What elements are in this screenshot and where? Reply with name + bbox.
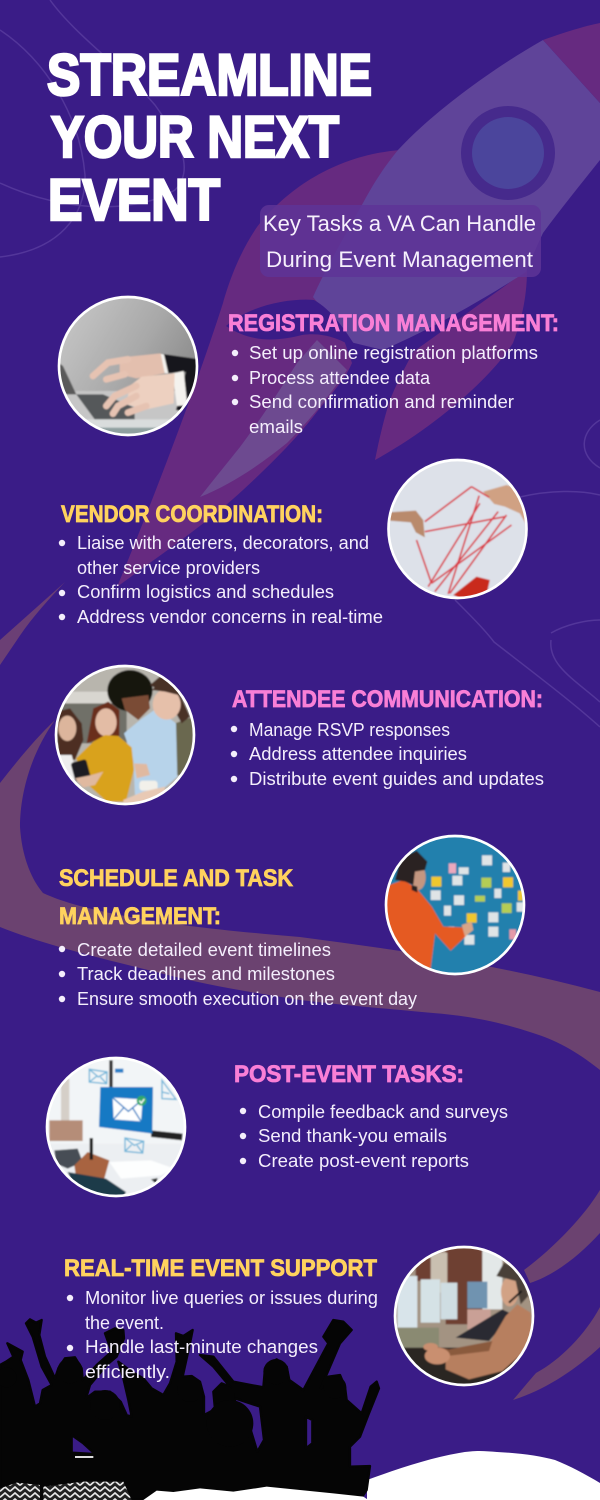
title: STREAMLINE	[47, 43, 372, 108]
heading: POST-EVENT TASKS:	[234, 1061, 464, 1088]
bullet list: Manage RSVP responses	[249, 720, 450, 740]
background thin curved lines	[0, 0, 600, 727]
panel: schedule and task management	[59, 830, 530, 1009]
photo: email on screen	[46, 1056, 186, 1198]
title: EVENT	[48, 168, 220, 233]
bullet list: Address attendee inquiries	[249, 744, 467, 764]
photo: hands typing on laptop	[58, 296, 198, 436]
panel: real-time event support	[64, 1241, 539, 1391]
bullet list: Monitor live queries or issues during	[85, 1288, 378, 1308]
bullet list	[67, 1288, 378, 1382]
photo: call centre agent	[394, 1246, 534, 1386]
subtitle box: Key Tasks a VA Can Handle	[263, 211, 536, 236]
bullet list: Ensure smooth execution on the event day	[77, 989, 417, 1009]
heading	[59, 865, 293, 930]
swoosh band	[0, 720, 600, 1070]
photo: hands with red string	[387, 458, 528, 600]
photo: group around a phone	[54, 664, 196, 806]
bullet list: Liaise with caterers, decorators, and	[77, 533, 369, 553]
bullet list: Handle last-minute changes	[85, 1337, 318, 1357]
bullet list: Create post-event reports	[258, 1151, 469, 1171]
heading: ATTENDEE COMMUNICATION:	[232, 686, 543, 713]
bullet list	[240, 1102, 508, 1171]
rocket notch arc	[226, 300, 358, 350]
panel: post-event tasks	[41, 1052, 508, 1202]
rocket illustration	[117, 23, 600, 587]
bullet list: Create detailed event timelines	[77, 940, 331, 960]
white bottom wave	[367, 1451, 600, 1500]
swoosh right upper	[524, 1190, 600, 1283]
bullet list: Address vendor concerns in real-time	[77, 607, 383, 627]
bullet list	[232, 343, 538, 437]
heading: SCHEDULE AND TASK	[59, 865, 293, 892]
bullet list: Send thank-you emails	[258, 1126, 447, 1146]
bullet list: emails	[249, 417, 303, 437]
title: YOUR NEXT	[51, 105, 339, 170]
bullet list: the event.	[85, 1313, 164, 1333]
subtitle box: During Event Management	[266, 247, 533, 272]
subtitle box	[260, 205, 541, 277]
rocket window glass	[472, 117, 544, 189]
swoosh right lower	[513, 1307, 600, 1400]
bullet list: Process attendee data	[249, 368, 431, 388]
rocket nose	[543, 23, 600, 103]
bullet list	[59, 940, 417, 1009]
panel: attendee communication	[50, 660, 544, 810]
bullet list: Distribute event guides and updates	[249, 769, 544, 789]
panel: registration management	[53, 291, 559, 441]
rocket right wing	[375, 270, 527, 460]
bullet list: Compile feedback and surveys	[258, 1102, 508, 1122]
bullet list	[59, 533, 383, 627]
bullet list: efficiently.	[85, 1362, 170, 1382]
heading: REAL-TIME EVENT SUPPORT	[64, 1255, 377, 1282]
swoosh wedge left	[0, 582, 65, 665]
bullet list: other service providers	[77, 558, 260, 578]
heading: REGISTRATION MANAGEMENT:	[228, 310, 559, 337]
bullet list: Set up online registration platforms	[249, 343, 538, 363]
bullet list	[231, 720, 544, 789]
panel: vendor coordination	[59, 454, 532, 627]
rocket body	[313, 40, 600, 350]
heading: VENDOR COORDINATION:	[61, 501, 323, 528]
title	[47, 43, 372, 233]
bullet list: Confirm logistics and schedules	[77, 582, 334, 602]
rocket window ring	[461, 106, 555, 200]
photo: man placing sticky notes	[384, 834, 526, 976]
bullet list: Send confirmation and reminder	[249, 392, 514, 412]
rocket left wing and flame	[117, 150, 400, 587]
heading: MANAGEMENT:	[59, 903, 221, 930]
crowd silhouette	[0, 1319, 379, 1500]
rocket inner flame	[200, 340, 347, 497]
bullet list: Track deadlines and milestones	[77, 964, 335, 984]
